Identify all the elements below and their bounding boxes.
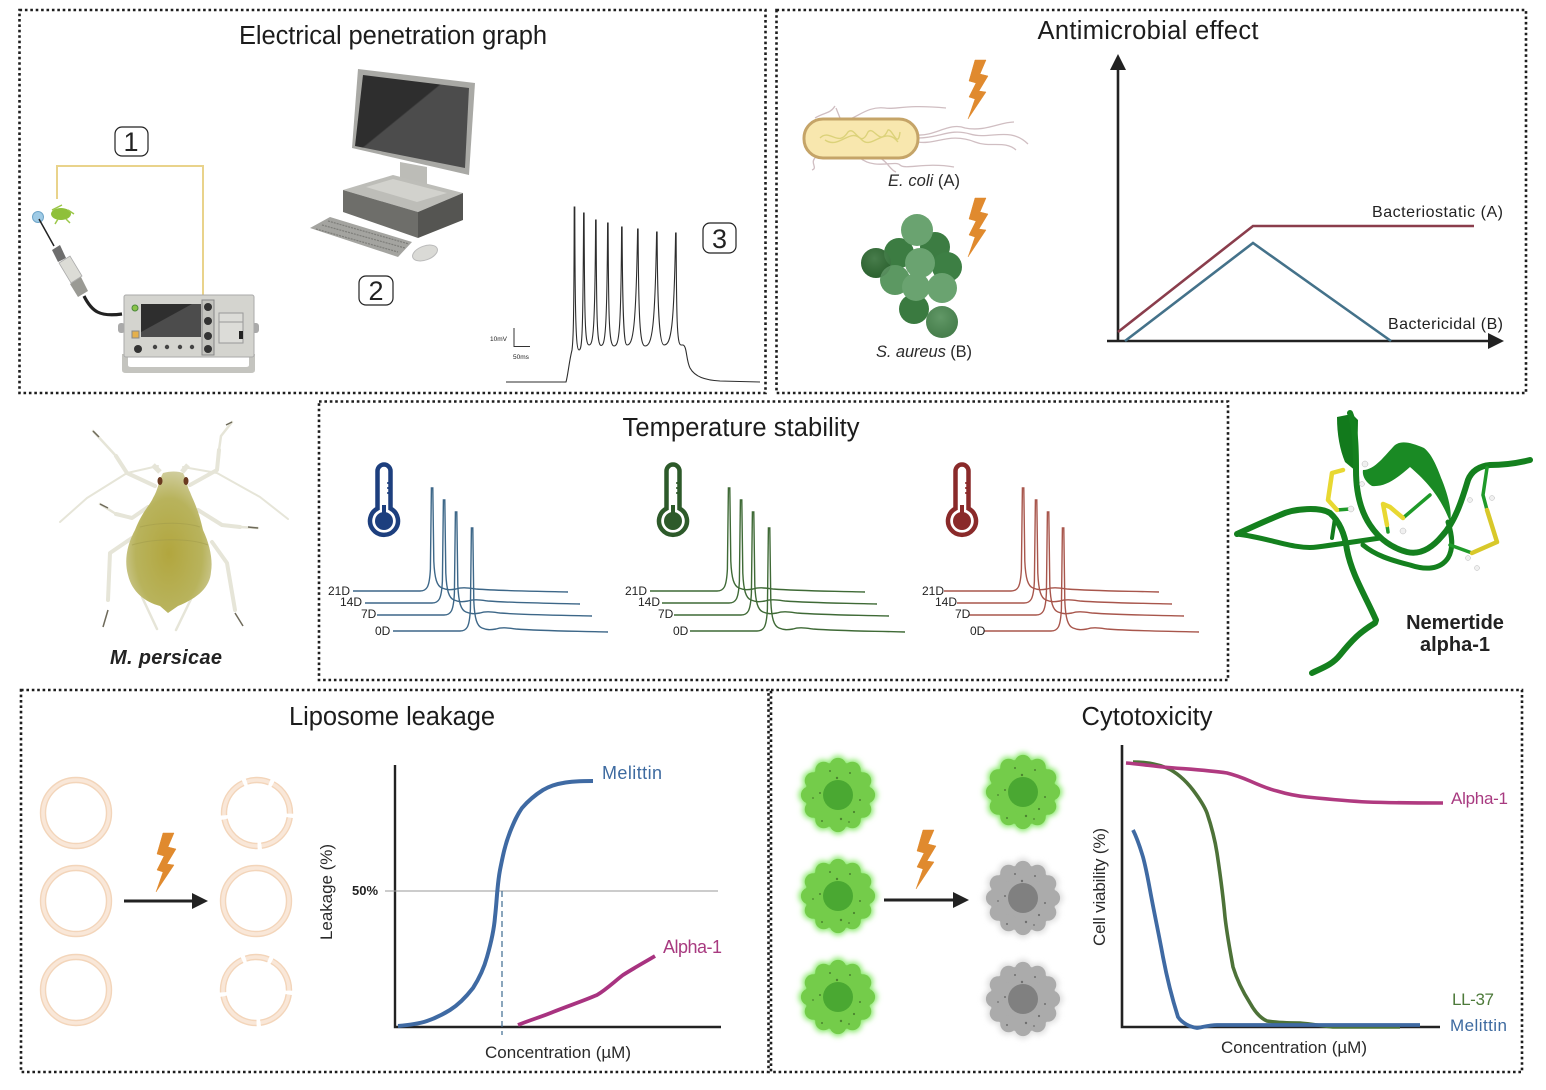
title: liposome leakage: Liposome leakage [289,703,495,731]
chart: leakage: 50% [352,883,378,898]
arrow [124,893,208,909]
yellow wire [57,166,203,295]
day labels blue: 0D [375,624,391,638]
icon: aphid on probe [32,205,74,246]
label: Nemertide alpha-1: alpha-1 [1420,634,1490,656]
day labels green: 14D [638,595,660,609]
day labels green: 7D [658,607,674,621]
chart: cell viability [1090,745,1508,1057]
cells: treated column [983,753,1063,1039]
label box 2 [359,276,393,306]
icon: desktop computer [310,69,475,264]
chart: red traces [944,488,1199,632]
day labels red: 21D [922,584,944,598]
day labels blue: 21D [328,584,350,598]
icon: blue thermometer [370,464,398,535]
chart: leakage: Melittin [602,763,662,783]
panel: liposome leakage [21,690,768,1072]
day labels green: 0D [673,624,689,638]
day labels blue: 7D [361,607,377,621]
chart: blue traces [353,488,608,632]
icon: probe holder and cable [52,245,122,315]
liposomes: treated column [216,773,297,1030]
icon: lightning bolt [968,198,988,257]
label: S. aureus: S. aureus (B) [876,343,972,361]
label: E. coli: E. coli (A) [888,172,960,190]
panel: antimicrobial effect [776,10,1526,393]
day labels red: 14D [935,595,957,609]
label: Nemertide alpha-1 [1406,612,1504,656]
chart: leakage: Leakage (%) [317,844,336,940]
label box 3 [703,223,736,254]
label box 1: 1 [123,127,139,157]
day labels red: 7D [955,607,971,621]
chart: leakage: Concentration (µM) [485,1043,631,1062]
day labels green: 21D [625,584,647,598]
icon: lightning bolt [156,833,176,892]
arrow [884,892,969,908]
scale bar: 10mV [490,336,508,343]
day labels green [625,584,689,638]
icon: red thermometer [948,464,976,535]
chart: cell viability: Melittin [1450,1016,1507,1035]
icon: EPG amplifier device [118,295,259,373]
title: antimicrobial effect: Antimicrobial effect [1038,17,1258,45]
chart: action potential trace [506,207,760,382]
chart: green traces [650,488,905,632]
liposomes: intact column [40,778,112,1026]
chart: cell viability: Concentration (µM) [1221,1038,1367,1057]
icon: S. aureus cluster [861,214,962,338]
image: M. persicae aphid [60,422,288,630]
chart: bacteriostatic vs bactericidal: Bacteriostatic (A) [1372,204,1503,221]
chart: leakage [317,763,722,1062]
chart: bacteriostatic vs bactericidal: Bactericidal (B) [1388,316,1503,333]
icon: lightning bolt [916,830,936,889]
cells: healthy column [799,756,877,1036]
title: temperature stability: Temperature stability [622,414,860,442]
label box 1 [115,127,148,157]
chart: cell viability: LL-37 [1452,990,1494,1009]
day labels red: 0D [970,624,986,638]
protein structure: Nemertide alpha-1 [1237,413,1530,673]
chart: cell viability: Alpha-1 [1451,789,1508,808]
label: Nemertide alpha-1: Nemertide [1406,612,1504,634]
label: M. persicae: M. persicae [110,647,222,669]
icon: green thermometer [659,464,687,535]
panel: electrical penetration graph [20,10,766,393]
icon: E. coli bacterium [804,106,1028,172]
scale bar [490,328,530,361]
panel: cytotoxicity [771,690,1522,1072]
day labels red [922,584,986,638]
scale bar: 50ms [513,354,530,361]
panel: temperature stability [319,402,1228,680]
chart: cell viability: Cell viability (%) [1090,828,1109,946]
chart: leakage: Alpha-1 [663,937,722,957]
label box 3: 3 [712,224,727,254]
day labels blue [328,584,391,638]
icon: lightning bolt [968,60,988,119]
label box 2: 2 [368,276,384,306]
title: electrical penetration graph: Electrical penetration graph [239,22,547,50]
day labels blue: 14D [340,595,362,609]
title: cytotoxicity: Cytotoxicity [1082,703,1213,731]
chart: bacteriostatic vs bactericidal [1107,54,1504,349]
